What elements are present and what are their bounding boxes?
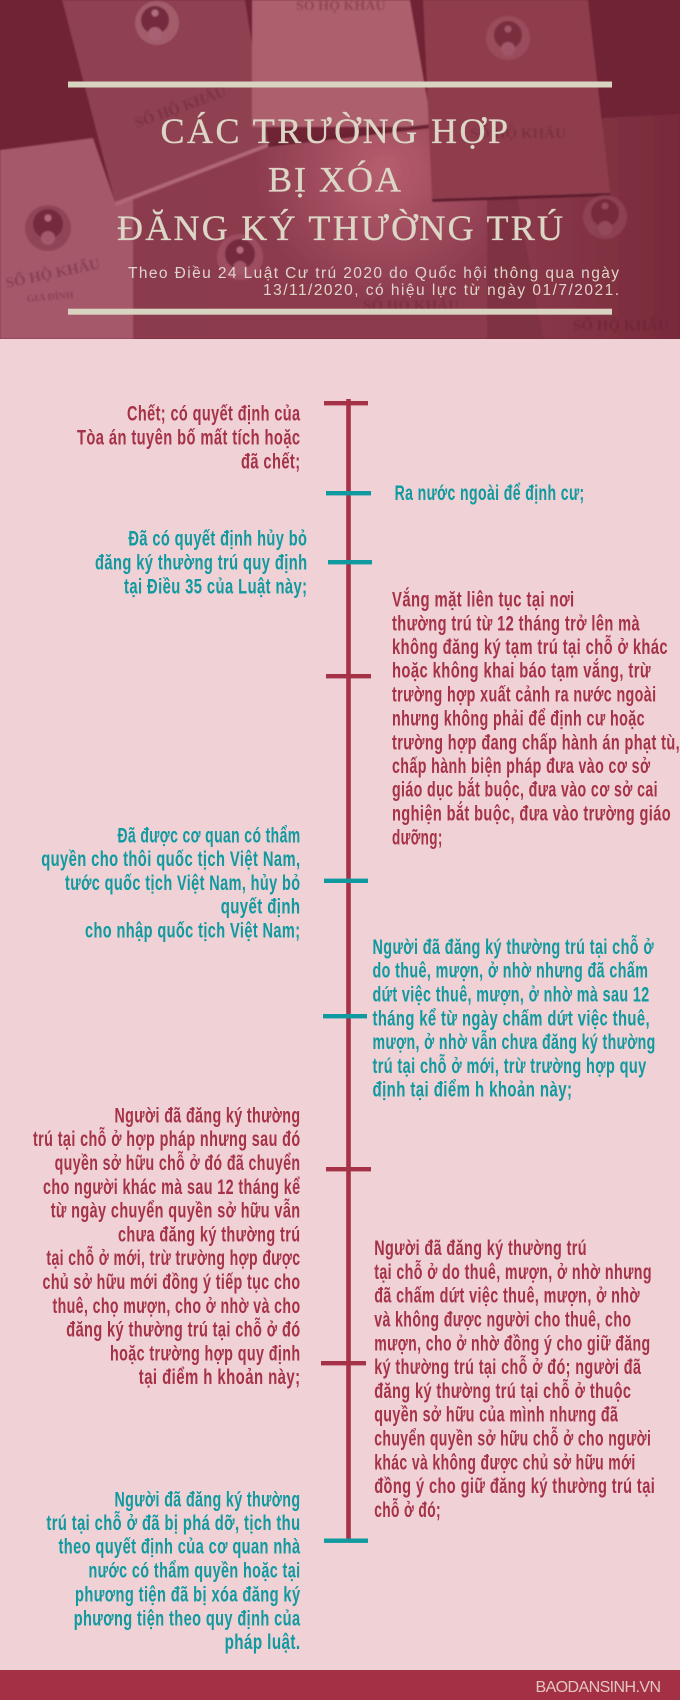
- subtitle: Theo Điều 24 Luật Cư trú 2020 do Quốc hội thông qua ngày: [128, 265, 619, 282]
- printed words on the books: SỔ HỘ KHẨU: [4, 254, 102, 292]
- tick 5: [324, 879, 368, 883]
- text block: ownership transferred: tại điểm h khoản này;: [139, 1365, 300, 1389]
- text block: demolished residence: [46, 1487, 301, 1654]
- text block: ownership transferred: Người đã đăng ký thường: [114, 1103, 300, 1127]
- tick 1: [324, 401, 368, 405]
- text block: demolished residence: theo quyết định của cơ quan nhà: [58, 1535, 301, 1559]
- text block: ownership transferred: đăng ký thường trú tại chỗ ở đó: [66, 1317, 300, 1342]
- text block: nationality withdrawn: cho nhập quốc tịch Việt Nam;: [85, 918, 300, 942]
- printed words on the books: [4, 0, 669, 334]
- text block: death or declared missing: đã chết;: [241, 449, 300, 473]
- text block: cancellation decision: đăng ký thường trú quy định: [95, 551, 308, 575]
- text block: ownership transferred: hoặc trường hợp quy định: [110, 1341, 300, 1365]
- text block: cancellation decision: [95, 527, 308, 599]
- text block: demolished residence: trú tại chỗ ở đã bị phá dỡ, tịch thu: [46, 1510, 301, 1535]
- timeline: [321, 399, 372, 1543]
- printed words on the books: SỔ HỘ KHẨU: [470, 124, 566, 142]
- emblems on the books: [25, 1, 627, 280]
- text block: nationality withdrawn: [41, 823, 300, 942]
- text block: no consent to keep registration: chỗ ở đó;: [374, 1497, 441, 1522]
- text block: nationality withdrawn: quyết định: [221, 895, 300, 919]
- text block: cancellation decision: Đã có quyết định hủy bỏ: [128, 527, 307, 551]
- printed words on the books: SỔ HỘ KHẨU: [573, 316, 669, 334]
- text block: demolished residence: nước có thẩm quyền hoặc tại: [88, 1558, 300, 1582]
- tick 7: [326, 1167, 371, 1171]
- timeline spine: [346, 399, 351, 1541]
- text block: ownership transferred: trú tại chỗ ở hợp pháp nhưng sau đó: [33, 1126, 300, 1151]
- text block: nationality withdrawn: tước quốc tịch Việt Nam, hủy bỏ: [65, 871, 300, 895]
- text block: ownership transferred: từ ngày chuyển quyền sở hữu vẫn: [51, 1198, 301, 1223]
- text block: ownership transferred: cho người khác mà sau 12 tháng kể: [43, 1175, 300, 1199]
- tick 8: [321, 1361, 366, 1365]
- tick 4: [326, 674, 371, 678]
- text block: cancellation decision: tại Điều 35 của Luật này;: [124, 575, 308, 599]
- header photo: household registration books: [0, 0, 680, 339]
- bottom rule: [68, 309, 612, 315]
- footer source label: BAODANSINH.VN: [536, 1679, 661, 1696]
- text block: continuous absence: Vắng mặt liên tục tại nơi: [392, 587, 575, 612]
- text block: settling abroad: Ra nước ngoài để định cư;: [395, 481, 585, 505]
- text block: no consent to keep registration: [374, 1236, 655, 1522]
- text block: continuous absence: dưỡng;: [392, 825, 443, 849]
- tick 3: [328, 560, 372, 564]
- footer bar: [0, 1670, 680, 1700]
- text block: demolished residence: pháp luật.: [225, 1630, 300, 1654]
- text block: ownership transferred: chưa đăng ký thường trú: [118, 1222, 300, 1246]
- text block: death or declared missing: Chết; có quyết định của: [127, 402, 301, 426]
- text block: demolished residence: Người đã đăng ký thường: [114, 1487, 300, 1511]
- tick 9: [324, 1538, 368, 1543]
- printed words on the books: SỔ HỘ KHẨU: [132, 82, 229, 132]
- title: ĐĂNG KÝ THƯỜNG TRÚ: [117, 208, 563, 248]
- header panel: [0, 0, 680, 339]
- printed words on the books: SỔ HỘ KHẨU: [363, 296, 459, 314]
- text block: continuous absence: [392, 587, 680, 849]
- title: CÁC TRƯỜNG HỢP: [160, 111, 508, 151]
- text block: ownership transferred: tại chỗ ở mới, trừ trường hợp được: [46, 1245, 301, 1270]
- title: [117, 111, 563, 248]
- title: BỊ XÓA: [268, 160, 401, 200]
- text block: demolished residence: phương tiện đã bị xóa đăng ký: [75, 1583, 300, 1607]
- subtitle: [128, 265, 619, 299]
- text block: ownership transferred: thuê, chọ mượn, cho ở nhờ và cho: [52, 1294, 300, 1318]
- text block: ownership transferred: quyền sở hữu chỗ ở đó đã chuyển: [55, 1150, 300, 1175]
- text block: nationality withdrawn: Đã được cơ quan có thẩm: [118, 823, 300, 847]
- tick 2: [326, 491, 371, 495]
- text block: ownership transferred: chủ sở hữu mới đồng ý tiếp tục cho: [42, 1270, 300, 1294]
- text block: death or declared missing: Tòa án tuyên bố mất tích hoặc: [77, 425, 300, 449]
- printed words on the books: GIA ĐÌNH: [26, 289, 74, 305]
- tick 6: [323, 1014, 367, 1018]
- top rule: [68, 82, 612, 88]
- text block: nationality withdrawn: quyền cho thôi quốc tịch Việt Nam,: [41, 847, 300, 871]
- text block: ownership transferred: [33, 1103, 300, 1389]
- text block: demolished residence: phương tiện theo quy định của: [74, 1606, 301, 1630]
- text block: rented residence ended: định tại điểm h khoản này;: [372, 1078, 572, 1102]
- text block: death or declared missing: [77, 402, 301, 473]
- text block: rented residence ended: [372, 934, 656, 1102]
- subtitle: 13/11/2020, có hiệu lực từ ngày 01/7/2021.: [263, 282, 619, 299]
